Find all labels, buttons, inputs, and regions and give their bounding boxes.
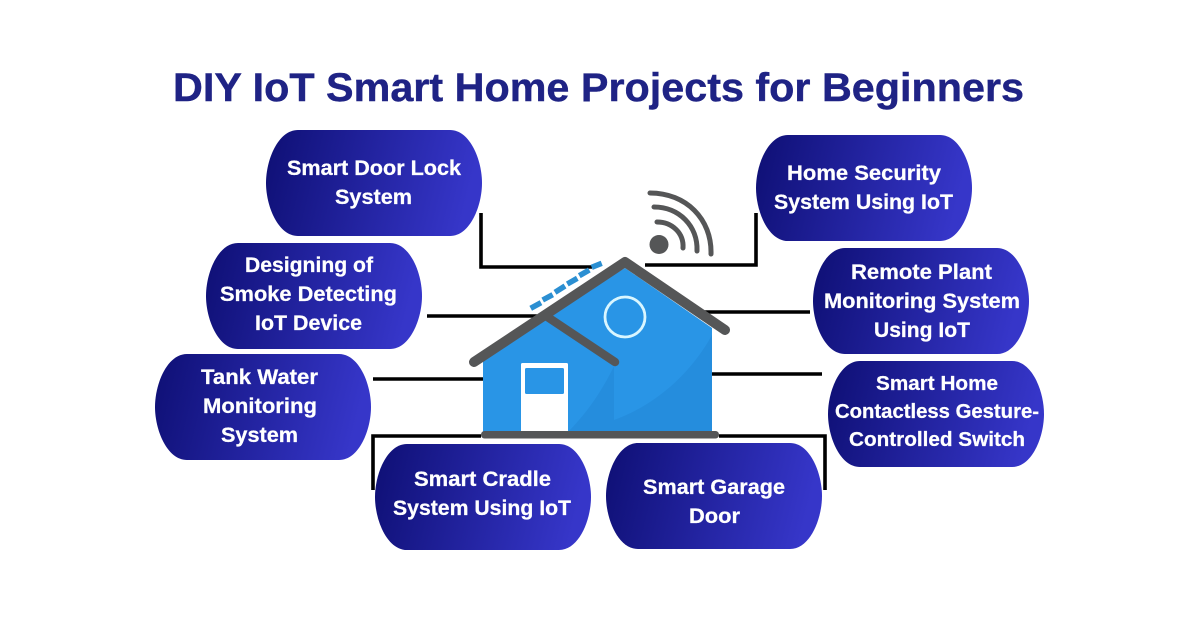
solar panels xyxy=(531,263,602,308)
panel: Designing of Smoke Detecting IoT Device: Designing of xyxy=(245,254,374,277)
panel: Smart Door Lock System xyxy=(266,130,482,236)
round window xyxy=(605,297,645,337)
panel: Remote Plant Monitoring System Using IoT: Using IoT xyxy=(874,319,970,342)
title: DIY IoT Smart Home Projects for Beginners xyxy=(173,66,1024,110)
panel: Smart Door Lock System: System xyxy=(335,186,412,209)
panel: Tank Water Monitoring System xyxy=(155,354,371,460)
panel: Tank Water Monitoring System: Monitoring xyxy=(203,395,317,418)
panel: Home Security System Using IoT: Home Security xyxy=(787,162,941,185)
house body xyxy=(483,268,712,432)
panel: Smart Home Contactless Gesture-Controlled Switch: Contactless Gesture- xyxy=(835,401,1039,423)
panel: Smart Garage Door: Smart Garage xyxy=(643,476,785,499)
panel: Designing of Smoke Detecting IoT Device: IoT Device xyxy=(255,312,362,335)
panel: Smart Cradle System Using IoT: Smart Cradle xyxy=(414,468,551,491)
icon: wifi signal xyxy=(650,193,711,254)
panel: Smart Home Contactless Gesture-Controlled Switch xyxy=(828,361,1044,467)
panel: Remote Plant Monitoring System Using IoT xyxy=(813,248,1029,354)
panel: Designing of Smoke Detecting IoT Device xyxy=(206,243,422,349)
icon: smart house xyxy=(474,262,725,438)
panel: Home Security System Using IoT: System Using IoT xyxy=(774,191,953,214)
panel: Smart Door Lock System: Smart Door Lock xyxy=(287,157,461,180)
panel: Designing of Smoke Detecting IoT Device: Smoke Detecting xyxy=(220,283,397,306)
panel: Tank Water Monitoring System: System xyxy=(221,424,298,447)
panel: Tank Water Monitoring System: Tank Water xyxy=(201,366,318,389)
panel: Smart Home Contactless Gesture-Controlled Switch: Smart Home xyxy=(876,373,998,395)
panel: Smart Cradle System Using IoT xyxy=(375,444,591,550)
panel: Smart Garage Door xyxy=(606,443,822,549)
panel: Smart Garage Door: Door xyxy=(689,505,740,528)
connector lines xyxy=(373,213,825,490)
door xyxy=(521,363,568,432)
panel: Remote Plant Monitoring System Using IoT: Remote Plant xyxy=(851,261,992,284)
panel: Smart Home Contactless Gesture-Controlled Switch: Controlled Switch xyxy=(849,429,1025,451)
panel: Home Security System Using IoT xyxy=(756,135,972,241)
body shading xyxy=(568,335,712,432)
roof xyxy=(474,262,725,362)
panel: Smart Cradle System Using IoT: System Using IoT xyxy=(393,497,571,520)
panel: Remote Plant Monitoring System Using IoT: Monitoring System xyxy=(824,290,1020,313)
base xyxy=(481,431,719,438)
